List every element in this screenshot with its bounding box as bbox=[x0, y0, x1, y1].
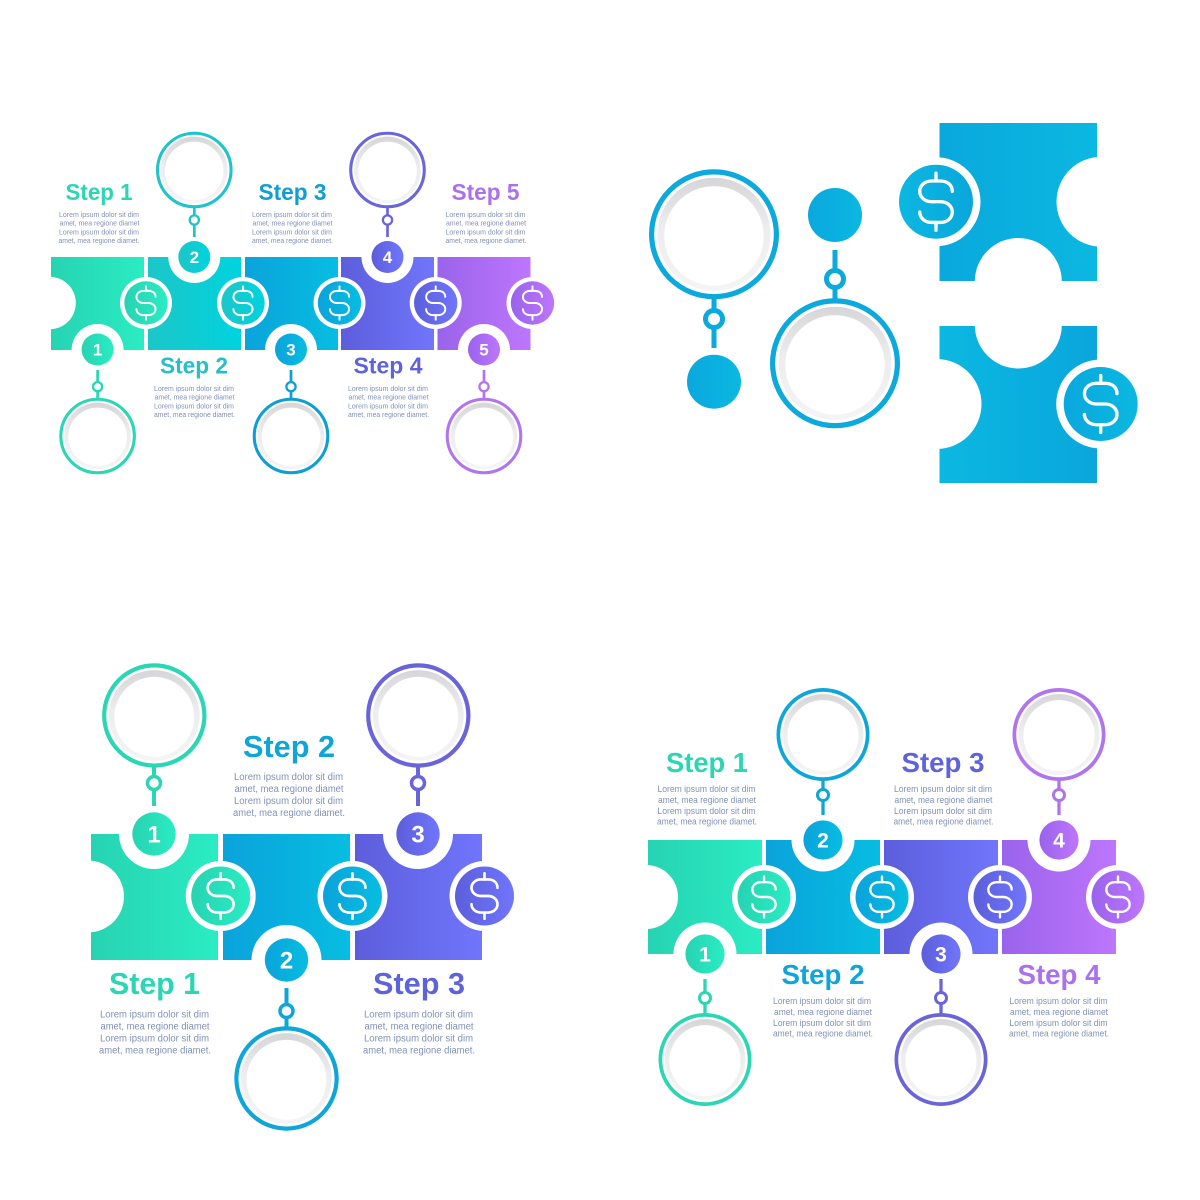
text block: step 4: Lorem ipsum dolor sit dim bbox=[348, 401, 428, 410]
step node 2: 2 bbox=[280, 948, 293, 974]
text block: step 1 bbox=[657, 784, 757, 826]
icon: dollar badge 3 bbox=[450, 861, 520, 931]
step node 1 bbox=[61, 334, 134, 473]
heading: step 3: Step 3 bbox=[902, 747, 984, 778]
puzzle piece 1 bbox=[23, 257, 144, 376]
heading: step 4: Step 4 bbox=[1018, 959, 1101, 990]
icon: dollar badge 1 bbox=[186, 861, 256, 931]
text block: step 4 bbox=[1009, 996, 1109, 1038]
heading: step 5: Step 5 bbox=[452, 179, 520, 205]
icon: dollar badge 4 bbox=[1086, 865, 1150, 929]
text block: step 4: Lorem ipsum dolor sit dim bbox=[1010, 1018, 1108, 1028]
text block: step 5: Lorem ipsum dolor sit dim bbox=[446, 227, 526, 236]
step node 3: 3 bbox=[935, 944, 947, 966]
text block: step 2: amet, mea regione diamet. bbox=[773, 1028, 873, 1038]
heading: step 3: Step 3 bbox=[373, 966, 465, 1001]
text block: step 3: Lorem ipsum dolor sit dim bbox=[894, 784, 992, 794]
text block: step 3: amet, mea regione diamet. bbox=[252, 236, 333, 245]
text block: step 2: amet, mea regione diamet. bbox=[154, 410, 235, 419]
icon: dollar badge 2 bbox=[318, 861, 388, 931]
text block: step 1: Lorem ipsum dolor sit dim bbox=[100, 1010, 209, 1020]
text block: step 4: Lorem ipsum dolor sit dim bbox=[348, 384, 428, 393]
text block: step 3: amet, mea regione diamet bbox=[894, 795, 993, 805]
step node 2 bbox=[778, 690, 868, 860]
step node 5 bbox=[447, 334, 521, 473]
step node 2: 2 bbox=[190, 248, 199, 267]
text block: step 3: amet, mea regione diamet bbox=[364, 1022, 474, 1032]
text block: step 2: Lorem ipsum dolor sit dim bbox=[773, 996, 871, 1006]
step node 1 bbox=[660, 934, 750, 1104]
text block: step 3: amet, mea regione diamet bbox=[252, 219, 333, 228]
text block: step 2: Lorem ipsum dolor sit dim bbox=[154, 384, 234, 393]
puzzle piece: notch top with dollar at right bbox=[892, 282, 1145, 483]
icon: dollar badge 2 bbox=[850, 865, 914, 929]
text block: step 1: Lorem ipsum dolor sit dim bbox=[658, 806, 756, 816]
text block: step 4: amet, mea regione diamet bbox=[1010, 1007, 1108, 1017]
text block: step 1: Lorem ipsum dolor sit dim bbox=[59, 210, 139, 219]
text block: step 1 bbox=[58, 210, 140, 245]
text block: step 2 bbox=[233, 772, 345, 819]
puzzle piece 1 bbox=[614, 840, 762, 986]
puzzle piece 3 bbox=[245, 257, 338, 376]
text block: step 4: Lorem ipsum dolor sit dim bbox=[1010, 996, 1108, 1006]
text block: step 1: Lorem ipsum dolor sit dim bbox=[658, 784, 756, 794]
text block: step 3 bbox=[363, 1010, 475, 1056]
panel: component kit bbox=[652, 123, 1146, 483]
text block: step 2 bbox=[773, 996, 873, 1038]
text block: step 1: amet, mea regione diamet bbox=[658, 795, 756, 805]
heading: step 1: Step 1 bbox=[666, 747, 748, 778]
heading: step 4: Step 4 bbox=[354, 352, 423, 378]
text block: step 3: Lorem ipsum dolor sit dim bbox=[364, 1010, 473, 1020]
text block: step 2: Lorem ipsum dolor sit dim bbox=[234, 772, 343, 783]
text block: step 5: Lorem ipsum dolor sit dim bbox=[446, 210, 526, 219]
puzzle piece 2 bbox=[148, 231, 241, 350]
text block: step 1: Lorem ipsum dolor sit dim bbox=[100, 1034, 209, 1044]
puzzle piece 3 bbox=[355, 799, 482, 960]
text block: step 2: amet, mea regione diamet bbox=[774, 1007, 872, 1017]
puzzle piece 2 bbox=[223, 834, 350, 995]
text block: step 1 bbox=[99, 1010, 211, 1056]
step node 4 bbox=[1014, 690, 1104, 860]
step node 1: 1 bbox=[93, 340, 102, 360]
step node 3: 3 bbox=[411, 822, 425, 848]
node component: ring above dot bbox=[652, 172, 776, 409]
text block: step 3: Lorem ipsum dolor sit dim bbox=[364, 1034, 473, 1044]
puzzle piece 1 bbox=[52, 799, 218, 960]
text block: step 3: Lorem ipsum dolor sit dim bbox=[252, 210, 332, 219]
step node 2 bbox=[158, 133, 231, 273]
puzzle piece 4 bbox=[1002, 808, 1116, 954]
text block: step 3 bbox=[252, 210, 333, 245]
step node 3 bbox=[368, 665, 468, 856]
text block: step 5: amet, mea regione diamet. bbox=[446, 236, 526, 245]
puzzle piece 5 bbox=[438, 257, 530, 376]
puzzle piece: notch bottom with dollar at left bbox=[892, 123, 1146, 325]
node component: dot above ring bbox=[773, 188, 897, 426]
text block: step 3: amet, mea regione diamet. bbox=[363, 1046, 475, 1056]
step node 1 bbox=[104, 665, 204, 856]
heading: step 2: Step 2 bbox=[243, 729, 335, 764]
text block: step 1: Lorem ipsum dolor sit dim bbox=[59, 227, 139, 236]
step node 5: 5 bbox=[479, 340, 489, 360]
text block: step 2: Lorem ipsum dolor sit dim bbox=[234, 796, 343, 807]
heading: step 3: Step 3 bbox=[258, 179, 326, 205]
text block: step 5: amet, mea regione diamet bbox=[446, 219, 526, 228]
heading: step 2: Step 2 bbox=[782, 959, 864, 990]
step node 1: 1 bbox=[699, 944, 711, 966]
icon: dollar badge 5 bbox=[506, 277, 558, 329]
panel: five step infographic bbox=[23, 133, 558, 473]
panel: three step infographic bbox=[52, 665, 520, 1129]
heading: step 1: Step 1 bbox=[66, 179, 133, 205]
heading: step 1: Step 1 bbox=[109, 966, 200, 1001]
step node 4: 4 bbox=[383, 248, 393, 267]
panel: four step infographic bbox=[614, 690, 1150, 1104]
text block: step 1: amet, mea regione diamet. bbox=[99, 1046, 211, 1056]
text block: step 1: amet, mea regione diamet. bbox=[657, 816, 757, 826]
step node 4: 4 bbox=[1053, 830, 1065, 852]
icon: dollar badge 2 bbox=[217, 277, 269, 329]
step node 1: 1 bbox=[147, 822, 161, 848]
step node 2: 2 bbox=[817, 830, 829, 852]
text block: step 4: amet, mea regione diamet bbox=[348, 393, 429, 402]
text block: step 2 bbox=[154, 384, 235, 419]
text block: step 2: Lorem ipsum dolor sit dim bbox=[154, 401, 234, 410]
icon: dollar badge 1 bbox=[120, 277, 172, 329]
text block: step 1: amet, mea regione diamet bbox=[100, 1022, 210, 1032]
text block: step 2: amet, mea regione diamet. bbox=[233, 808, 345, 819]
text block: step 4 bbox=[348, 384, 429, 419]
icon: dollar badge 3 bbox=[314, 277, 366, 329]
icon: dollar badge 4 bbox=[410, 277, 462, 329]
text block: step 1: amet, mea regione diamet bbox=[60, 219, 140, 228]
icon: dollar badge 3 bbox=[968, 865, 1032, 929]
step node 4 bbox=[351, 133, 424, 273]
puzzle piece 4 bbox=[341, 231, 434, 350]
puzzle piece 2 bbox=[766, 808, 880, 954]
text block: step 3: Lorem ipsum dolor sit dim bbox=[894, 806, 992, 816]
text block: step 3 bbox=[894, 784, 994, 826]
step node 3 bbox=[254, 334, 328, 473]
heading: step 2: Step 2 bbox=[160, 352, 228, 378]
text block: step 4: amet, mea regione diamet. bbox=[348, 410, 429, 419]
text block: step 2: amet, mea regione diamet bbox=[234, 784, 344, 795]
step node 3 bbox=[896, 934, 986, 1104]
text block: step 3: amet, mea regione diamet. bbox=[894, 816, 994, 826]
text block: step 2: amet, mea regione diamet bbox=[154, 393, 235, 402]
step node 3: 3 bbox=[286, 340, 296, 360]
puzzle piece 3 bbox=[884, 840, 998, 986]
text block: step 5 bbox=[446, 210, 526, 245]
text block: step 1: amet, mea regione diamet. bbox=[58, 236, 140, 245]
step node 2 bbox=[236, 938, 337, 1129]
text block: step 4: amet, mea regione diamet. bbox=[1009, 1028, 1109, 1038]
text block: step 2: Lorem ipsum dolor sit dim bbox=[773, 1018, 871, 1028]
text block: step 3: Lorem ipsum dolor sit dim bbox=[252, 227, 332, 236]
icon: dollar badge 1 bbox=[732, 865, 796, 929]
